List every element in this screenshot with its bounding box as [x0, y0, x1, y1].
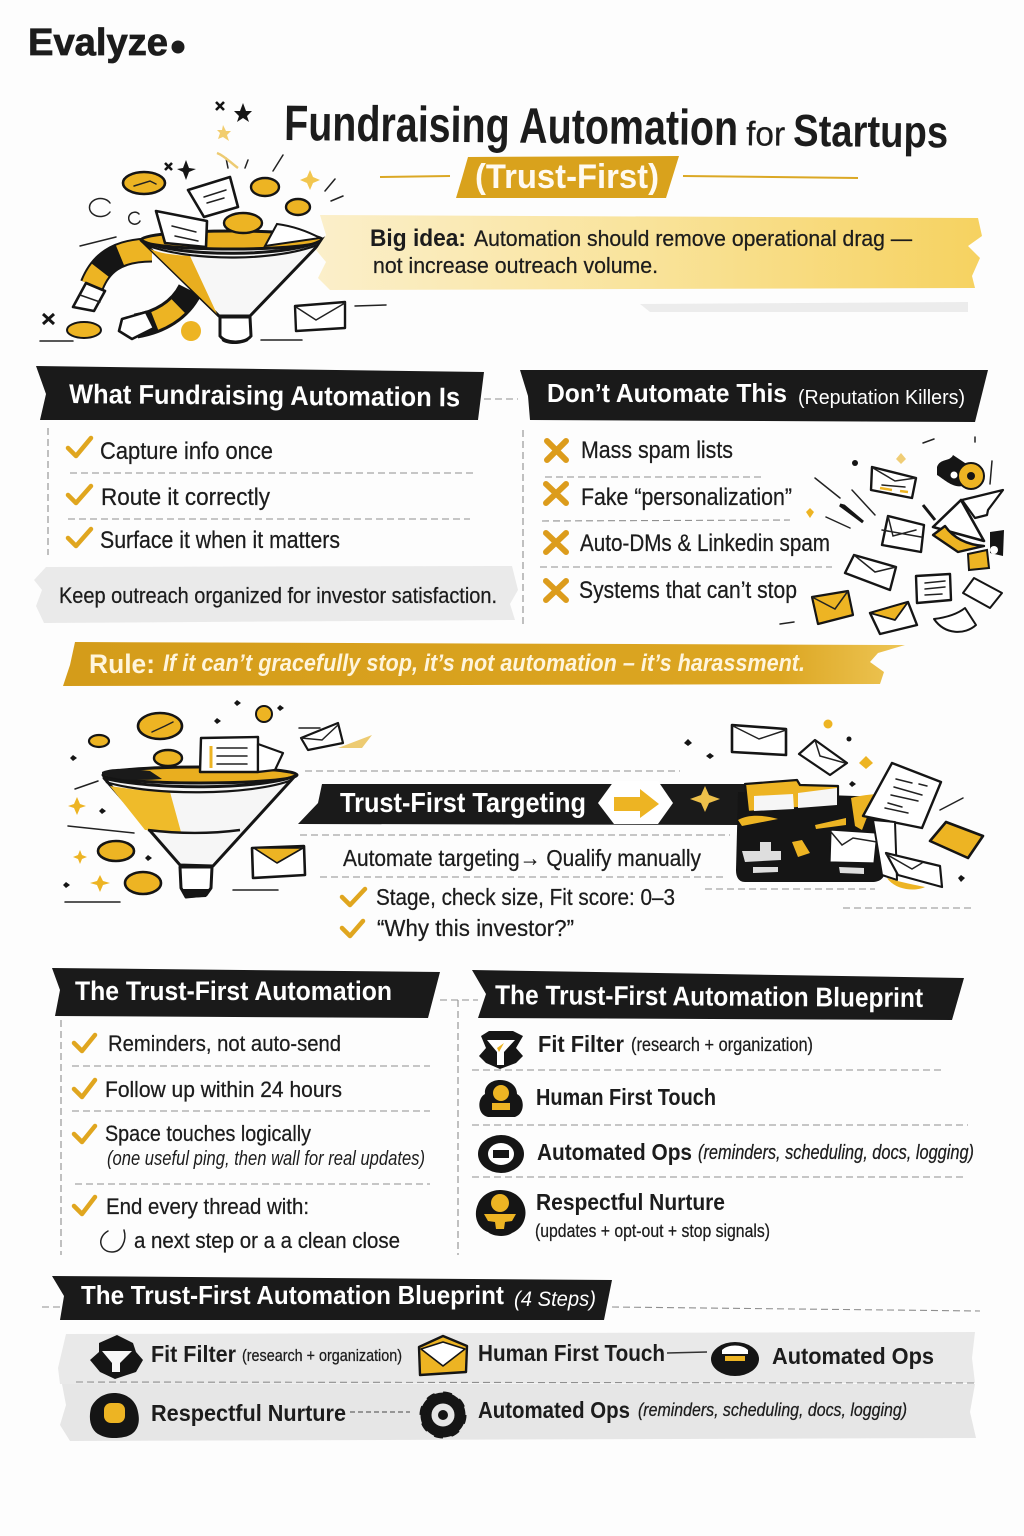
title: Startups — [793, 105, 948, 158]
heading: (Reputation Killers) — [798, 387, 965, 409]
text: human first touch: Human First Touch — [536, 1084, 716, 1110]
icon: gear — [423, 1395, 463, 1435]
text: automated ops: Automated Ops — [537, 1139, 692, 1165]
list item: stage: Stage, check size, Fit score: 0–3 — [376, 884, 675, 910]
panel: what fundraising automation is — [34, 366, 518, 623]
callout: big idea: Automation should remove operational drag — — [474, 226, 912, 251]
list item: end every thread — [74, 1194, 400, 1253]
icon: envelope — [419, 1336, 467, 1375]
heading: The Trust-First Automation — [75, 976, 392, 1006]
list item: space touches — [74, 1121, 425, 1170]
icon: hat — [711, 1342, 759, 1376]
heading — [36, 366, 484, 420]
subtitle ribbon: Trust-First: (Trust-First) — [475, 158, 659, 196]
title: Fundraising Automation — [284, 95, 738, 156]
text: respectful nurture: Respectful Nurture — [536, 1189, 725, 1215]
callout: big idea: Big idea: — [370, 225, 466, 252]
list item: route it correctly: Route it correctly — [101, 484, 270, 511]
text: automated ops detail: Automated Ops — [478, 1397, 630, 1423]
note band — [34, 566, 518, 623]
icon: person gold — [476, 1190, 526, 1236]
text: fit filter — [538, 1031, 813, 1057]
text: respectful nurture: (updates + opt-out + stop signals) — [535, 1221, 770, 1241]
heading: Don’t Automate This — [547, 378, 787, 408]
callout: rule banner: If it can’t gracefully stop, it’s not automation – it’s harassment. — [163, 650, 805, 677]
list item: fake personalization: Fake “personalization” — [581, 484, 792, 511]
list item: follow up: Follow up within 24 hours — [105, 1077, 342, 1102]
text: fit filter: (research + organization) — [631, 1035, 813, 1056]
heading — [52, 968, 440, 1018]
text: fit filter — [151, 1341, 402, 1367]
text: automated ops detail: (reminders, scheduling, docs, logging) — [638, 1400, 907, 1420]
heading — [52, 1276, 612, 1320]
note band: Keep outreach organized for investor satisfaction. — [59, 583, 497, 608]
list item: why: “Why this investor?” — [377, 915, 574, 941]
logo: Evalyze: Evalyze — [28, 22, 168, 64]
list item: capture info once: Capture info once — [100, 438, 273, 465]
text: fit filter: Fit Filter — [151, 1341, 236, 1367]
text: automate targeting: Automate targeting→ Qualify manually — [343, 845, 701, 871]
text: respectful nurture: Respectful Nurture — [151, 1400, 346, 1426]
panel: 4 steps blueprint — [42, 1276, 980, 1441]
illustration: hero funnel with magnet — [40, 102, 386, 344]
heading — [472, 970, 964, 1020]
text: automated ops detail — [478, 1397, 907, 1423]
heading: Trust-First Targeting — [340, 787, 586, 818]
illustration: targeting funnel — [63, 700, 372, 902]
list item: reminders: Reminders, not auto-send — [108, 1031, 341, 1056]
callout: rule banner: Rule: — [89, 649, 155, 679]
text: automated ops — [537, 1139, 974, 1165]
heading — [298, 784, 745, 825]
panel: trust-first automation — [52, 968, 478, 1255]
icon: funnel — [479, 1031, 523, 1069]
icon: person — [479, 1080, 523, 1117]
callout: big idea: not increase outreach volume. — [373, 253, 658, 278]
icon: chat — [478, 1135, 524, 1173]
list item: space touches: Space touches logically — [105, 1121, 311, 1146]
list item: surface it: Surface it when it matters — [100, 527, 340, 554]
subtitle ribbon: Trust-First — [380, 156, 858, 198]
list item: end every thread: End every thread with: — [106, 1194, 309, 1219]
list item: mass spam: Mass spam lists — [581, 437, 733, 464]
illustration: megaphone and scattered envelopes — [780, 437, 1004, 634]
text: fit filter: (research + organization) — [242, 1346, 402, 1365]
text: human first touch: Human First Touch — [478, 1340, 665, 1366]
text: automated ops: Automated Ops — [772, 1343, 934, 1369]
text: fit filter: Fit Filter — [538, 1031, 624, 1057]
list item: systems: Systems that can’t stop — [579, 577, 797, 604]
heading: The Trust-First Automation Blueprint — [495, 980, 923, 1013]
title: for — [746, 115, 785, 154]
heading: (4 Steps) — [514, 1288, 596, 1311]
callout: big idea — [316, 215, 982, 312]
list item: space touches: (one useful ping, then wall for real updates) — [107, 1148, 425, 1170]
panel: don't automate this — [520, 370, 988, 626]
text: respectful nurture — [535, 1189, 770, 1241]
heading: What Fundraising Automation Is — [69, 379, 460, 412]
steps band — [58, 1332, 976, 1441]
icon: nurture — [90, 1393, 139, 1438]
illustration: folder of envelopes — [684, 720, 983, 890]
heading: The Trust-First Automation Blueprint — [81, 1280, 504, 1310]
heading — [520, 370, 988, 422]
list item: auto-DMs: Auto-DMs & Linkedin spam — [580, 530, 830, 557]
callout: rule banner — [63, 642, 905, 686]
icon: arrow badge — [598, 781, 673, 824]
list item: end every thread: a next step or a a clean close — [134, 1228, 400, 1253]
panel: blueprint list — [458, 970, 974, 1255]
panel: trust-first targeting — [298, 771, 975, 941]
icon: sparkle — [690, 786, 720, 812]
icon: funnel — [90, 1335, 143, 1379]
